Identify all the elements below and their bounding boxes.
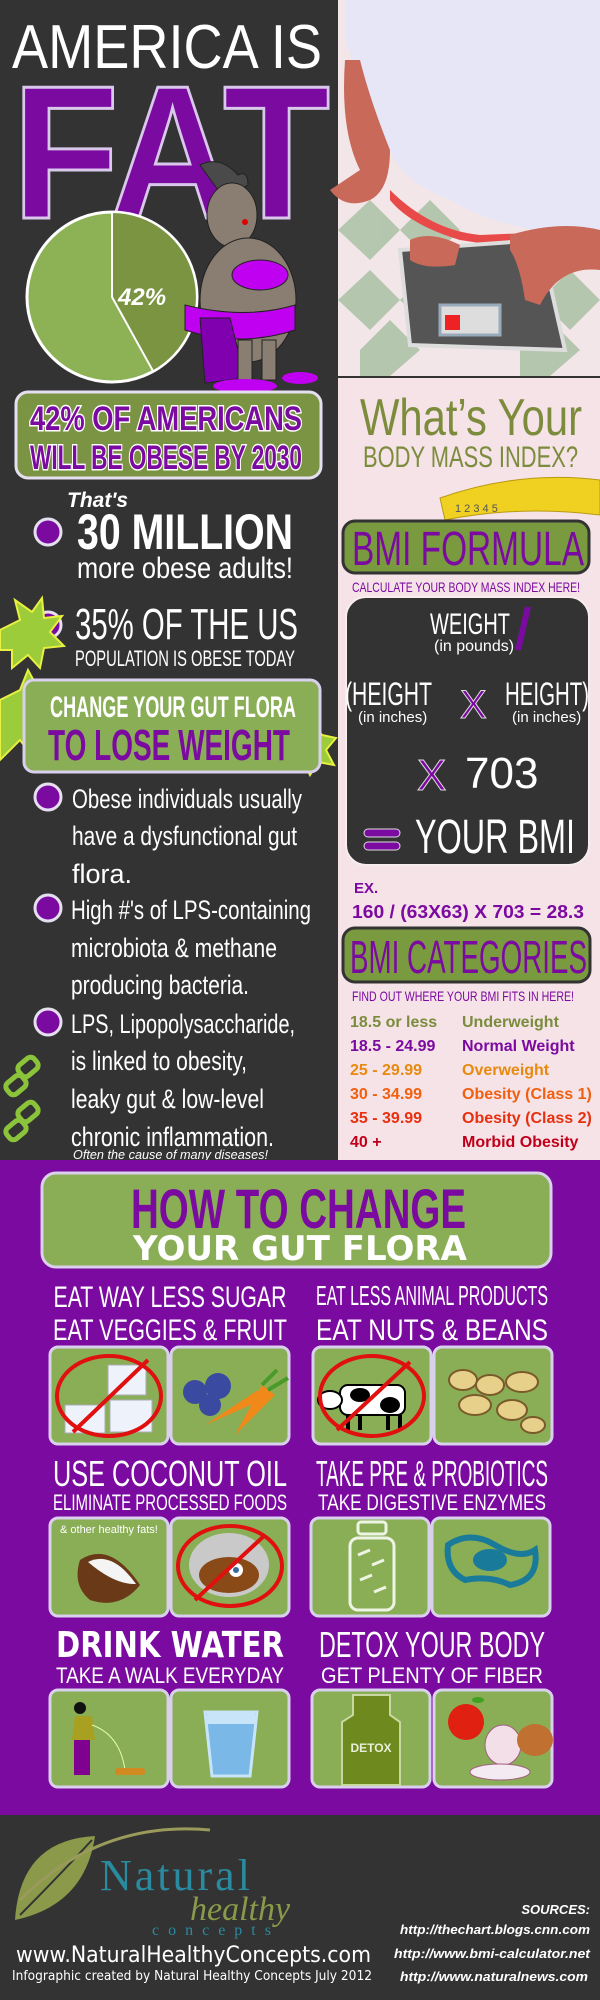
title: FAT: FAT (12, 47, 330, 259)
tips headings: GET PLENTY OF FIBER (321, 1663, 543, 1688)
icon: no processed food (178, 1526, 282, 1606)
callout: 42% of Americans box: WILL BE OBESE BY 2030 (30, 439, 302, 477)
table: BMI categories: Obesity (Class 1) (462, 1086, 592, 1103)
heading: how to change (42, 1173, 551, 1269)
text: sources (394, 1902, 591, 1984)
stat: 35% of the US: POPULATION IS OBESE TODAY (75, 646, 295, 671)
logo: Natural Healthy Concepts: healthy (190, 1891, 291, 1928)
panel: formula: (in pounds) (434, 638, 514, 655)
text block: gut flora facts: Often the cause of many diseases! (73, 1147, 268, 1162)
stat: 35% of the US (35, 600, 298, 671)
logo: Natural Healthy Concepts: concepts (152, 1922, 280, 1939)
panel: how to change gut flora (0, 1160, 600, 1815)
pie chart 42%: 42% (117, 284, 166, 311)
icon: tape measure: 1 2 3 4 5 (455, 503, 498, 515)
text: website and credit: www.NaturalHealthyConcepts.com (16, 1943, 371, 1968)
callout: change your gut flora: CHANGE YOUR GUT FLORA (50, 691, 296, 724)
text: sources: http://thechart.blogs.cnn.com (400, 1922, 590, 1937)
image boxes (50, 1347, 552, 1787)
text: example (352, 880, 584, 922)
table: BMI categories: 35 - 39.99 (350, 1110, 422, 1127)
panel: formula: (in inches) (358, 709, 427, 726)
stat: 30 million: That's (67, 489, 128, 512)
text: sources: SOURCES: (521, 1902, 590, 1917)
icon: no cow (318, 1356, 424, 1436)
panel: formula: X (417, 751, 446, 800)
icon: chain links (4, 1055, 40, 1142)
icon: glass of water (205, 1712, 257, 1776)
tips headings: ELIMINATE PROCESSED FOODS (53, 1490, 287, 1515)
tips headings: EAT VEGGIES & FRUIT (53, 1314, 287, 1347)
table: BMI categories (350, 1014, 592, 1151)
panel: BMI (338, 378, 600, 1160)
tips headings (53, 1280, 548, 1688)
tips headings: USE COCONUT OIL (53, 1453, 287, 1494)
text block: gut flora facts: flora. (72, 859, 132, 889)
tips headings: TAKE A WALK EVERYDAY (56, 1663, 284, 1688)
heading: how to change: YOUR GUT FLORA (132, 1229, 468, 1269)
panel: formula (345, 597, 589, 865)
table: BMI categories: 30 - 34.99 (350, 1086, 422, 1103)
callout: 42% of Americans box: 42% OF AMERICANS (30, 400, 302, 438)
stat: 30 million: more obese adults! (77, 552, 293, 585)
heading: BMI categories (343, 928, 590, 1004)
table: BMI categories: Morbid Obesity (462, 1134, 579, 1151)
stat: 30 million (35, 489, 293, 585)
text: example: EX. (354, 880, 378, 897)
tips headings: DRINK WATER (56, 1625, 284, 1666)
illustration: person on scale (330, 0, 600, 376)
heading: What's your BMI (360, 389, 582, 474)
logo: Natural Healthy Concepts: Natural (100, 1851, 253, 1900)
icon: green bacteria (0, 598, 336, 775)
text block: gut flora facts: is linked to obesity, (71, 1046, 247, 1076)
table: BMI categories: 25 - 29.99 (350, 1062, 422, 1079)
icon: cartoon woman (185, 162, 318, 393)
text block: gut flora facts: LPS, Lipopolysaccharide, (71, 1009, 295, 1039)
icon: tape measure (440, 477, 600, 520)
tips headings: EAT WAY LESS SUGAR (54, 1281, 286, 1314)
panel: formula: (in inches) (512, 709, 581, 726)
table: BMI categories: Underweight (462, 1014, 560, 1031)
stat: 35% of the US: 35% OF THE US (75, 600, 298, 649)
icon: detox bottle: DETOX (350, 1741, 392, 1755)
table: BMI categories: Obesity (Class 2) (462, 1110, 592, 1127)
text block: gut flora facts: Obese individuals usually (72, 784, 302, 814)
panel: formula: (HEIGHT (345, 676, 432, 712)
text block: gut flora facts: leaky gut & low-level (71, 1084, 264, 1114)
icon: woman walking dog (72, 1702, 145, 1775)
callout: change your gut flora: TO LOSE WEIGHT (48, 721, 290, 770)
text: website and credit: Infographic created by Natural Healthy Concepts July 2012 (12, 1969, 372, 1984)
icon: coconut (60, 1524, 158, 1603)
panel: formula: X (460, 683, 487, 727)
heading: BMI formula (343, 521, 589, 595)
text: example: 160 / (63X63) X 703 = 28.3 (352, 902, 584, 922)
icon: digestive system (448, 1538, 536, 1585)
title: America is: AMERICA IS (12, 13, 322, 82)
icon: detox bottle (342, 1695, 400, 1785)
pie chart 42% (27, 212, 197, 382)
table: BMI categories: 40 + (350, 1134, 382, 1151)
text block: gut flora facts: chronic inflammation. (71, 1122, 274, 1152)
icon: probiotic bottle (350, 1522, 394, 1610)
icon: blueberries and carrots (183, 1370, 288, 1435)
icon: apple and onions (448, 1697, 553, 1780)
table: BMI categories: 18.5 - 24.99 (350, 1038, 436, 1055)
tips headings: EAT NUTS & BEANS (316, 1314, 548, 1347)
text block: gut flora facts (35, 784, 311, 1162)
panel: formula: 703 (465, 749, 538, 798)
text: website and credit (12, 1943, 372, 1984)
icon: no sugar (57, 1356, 161, 1436)
panel: formula: WEIGHT (430, 608, 510, 641)
text block: gut flora facts: microbiota & methane (71, 933, 277, 963)
stat: 30 million: 30 MILLION (77, 504, 293, 560)
logo: Natural Healthy Concepts (15, 1829, 291, 1939)
footer (0, 1815, 600, 2000)
text: sources: http://www.bmi-calculator.net (394, 1946, 591, 1961)
table: BMI categories: Overweight (462, 1062, 550, 1079)
text block: gut flora facts: have a dysfunctional gut (72, 821, 297, 851)
text block: gut flora facts: producing bacteria. (71, 970, 249, 1000)
callout: change your gut flora (24, 680, 320, 772)
icon: coconut: & other healthy fats! (60, 1524, 158, 1536)
table: BMI categories: 18.5 or less (350, 1014, 437, 1031)
text: sources: http://www.naturalnews.com (400, 1969, 588, 1984)
callout: 42% of Americans box (16, 392, 321, 478)
text block: gut flora facts: High #'s of LPS-containing (71, 895, 311, 925)
table: BMI categories: Normal Weight (462, 1038, 575, 1055)
icon: beans (449, 1370, 545, 1433)
